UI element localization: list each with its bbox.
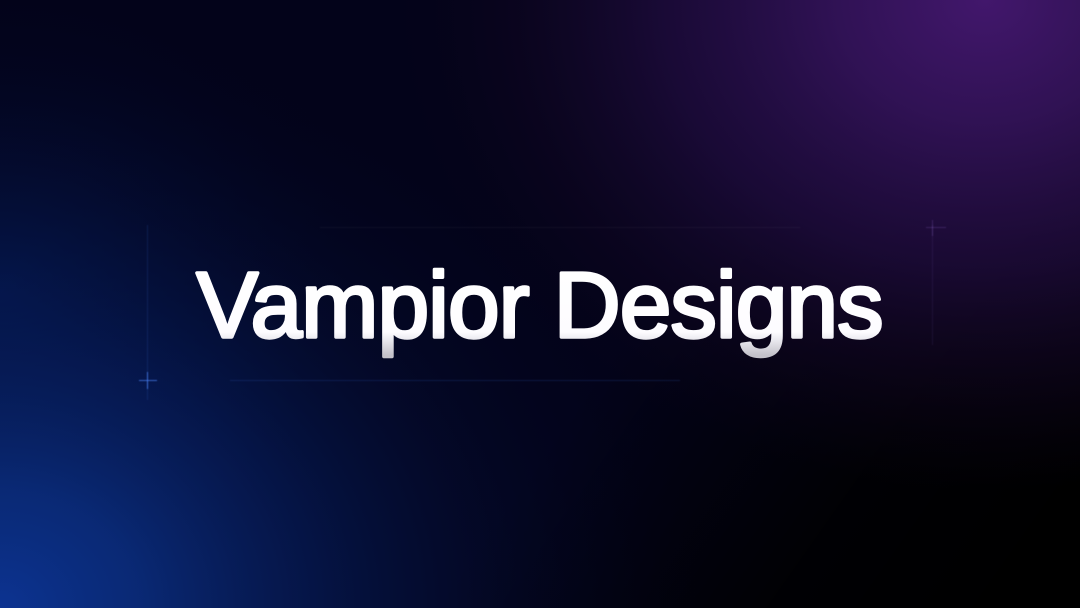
decorative frame lines xyxy=(148,225,932,400)
icon: faint crosshair top left xyxy=(136,226,158,228)
title: Vampior Designs xyxy=(196,253,884,357)
icon: blue crosshair bottom left xyxy=(139,372,157,389)
icon: faint crosshair top right xyxy=(926,220,946,236)
